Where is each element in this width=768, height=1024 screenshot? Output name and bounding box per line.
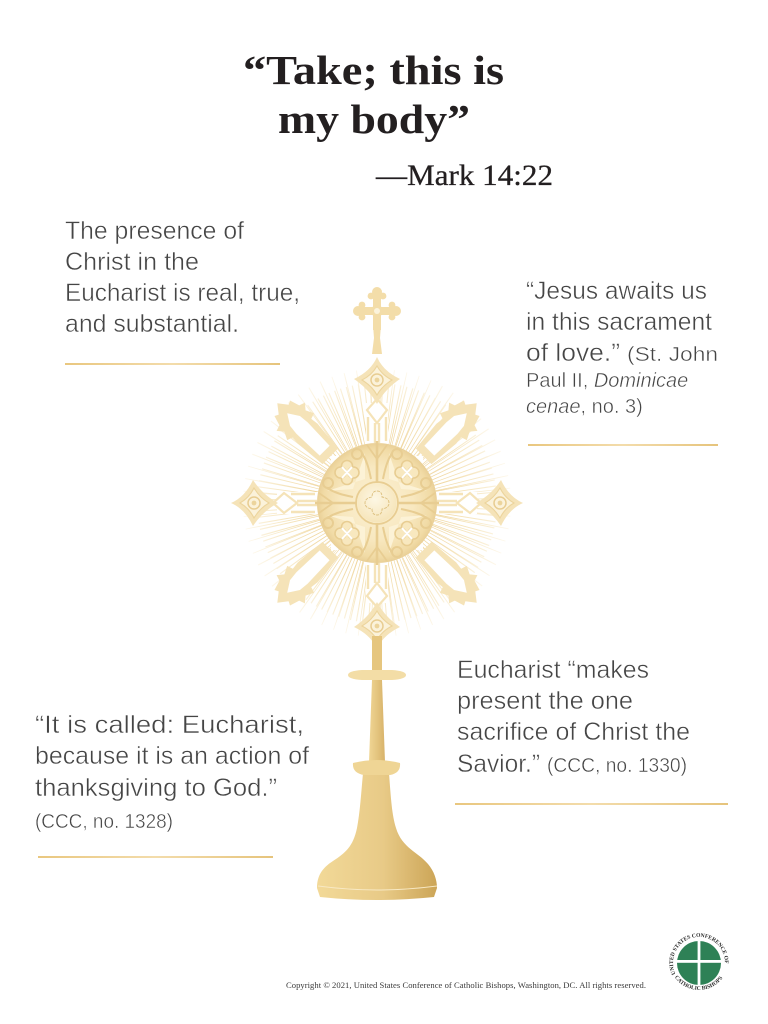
copyright line: Copyright © 2021, United States Conference of Catholic Bishops, Washington, DC. All rights reserved. xyxy=(286,980,646,990)
title xyxy=(243,47,504,142)
central medallion xyxy=(315,441,439,565)
text block: John Paul II quote: cenae, no. 3) xyxy=(526,396,643,418)
text block: thanksgiving quote: “It is called: Eucharist, xyxy=(35,711,304,739)
text block: real presence: Christ in the xyxy=(65,248,199,276)
scripture citation: —Mark 14:22 xyxy=(375,159,553,192)
text block: John Paul II quote: Paul II, Dominicae xyxy=(526,370,688,392)
text block: John Paul II quote xyxy=(526,277,718,418)
logo: USCCB seal: UNITED STATES CONFERENCE OF xyxy=(669,933,729,976)
sunburst rays xyxy=(280,406,474,600)
title: my body” xyxy=(278,96,470,142)
stand: base ring line xyxy=(318,886,437,890)
gold rule under real presence text xyxy=(65,363,280,365)
monstrance illustration xyxy=(231,287,523,900)
text block: John Paul II quote: of love.” xyxy=(526,339,620,367)
text block: real presence: The presence of xyxy=(65,217,244,245)
title: “Take; this is xyxy=(243,47,504,93)
text block: thanksgiving quote: because it is an action of xyxy=(35,742,309,770)
gold rule under thanksgiving quote xyxy=(38,856,273,858)
gold rule under sacrifice text xyxy=(455,803,728,805)
stand: collar xyxy=(353,760,400,775)
stand: upper knob xyxy=(348,670,406,680)
text block: thanksgiving quote xyxy=(35,711,309,833)
stand: neck xyxy=(372,636,382,672)
corner squares xyxy=(331,456,423,550)
text block: sacrifice of Christ: Savior.” xyxy=(457,750,540,778)
text block: thanksgiving quote: thanksgiving to God.” xyxy=(35,774,277,802)
text block: sacrifice of Christ: Eucharist “makes xyxy=(457,656,649,684)
text block: thanksgiving quote: (CCC, no. 1328) xyxy=(35,811,173,833)
text block: real presence xyxy=(65,217,300,338)
gold rule under John Paul II quote xyxy=(528,444,718,446)
text block: John Paul II quote: “Jesus awaits us xyxy=(526,277,707,305)
logo: USCCB seal: CATHOLIC BISHOPS xyxy=(676,976,722,990)
text block: real presence: and substantial. xyxy=(65,310,239,338)
text block: John Paul II quote: in this sacrament xyxy=(526,308,712,336)
text block: John Paul II quote: (St. John xyxy=(627,344,718,366)
text block: sacrifice of Christ: sacrifice of Christ the xyxy=(457,718,690,746)
ornate arms xyxy=(231,357,523,649)
icon: cross finial xyxy=(353,287,401,354)
stand: tapered stem xyxy=(369,680,385,762)
text block: real presence: Eucharist is real, true, xyxy=(65,279,300,307)
text block: sacrifice of Christ: (CCC, no. 1330) xyxy=(547,755,687,777)
text block: sacrifice of Christ xyxy=(457,656,690,778)
text block: sacrifice of Christ: present the one xyxy=(457,687,633,715)
stand: foot xyxy=(317,773,437,900)
